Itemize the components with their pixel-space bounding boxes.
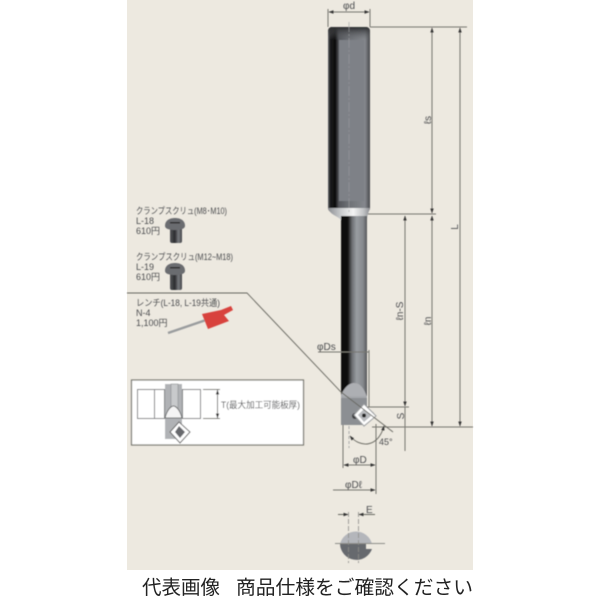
- dimension labels: 45°: [379, 437, 393, 447]
- accessory: wrench N-4: [136, 298, 233, 333]
- caption: 代表画像: [142, 577, 220, 599]
- accessory: clamp screw L-18: クランプスクリュ(M8･M10): [136, 206, 227, 216]
- centre line: [348, 22, 350, 212]
- accessory: clamp screw L-19: L-19: [136, 262, 154, 272]
- icon: screw: [165, 263, 185, 290]
- icon: screw: [165, 218, 185, 243]
- dimension labels: ℓn-S: [395, 301, 406, 320]
- dimension labels: φDs: [317, 342, 336, 353]
- thickness bracket: [203, 390, 220, 418]
- tool body: [328, 27, 376, 426]
- plates: [138, 390, 200, 418]
- inset: plate thickness: [132, 380, 304, 445]
- accessory: clamp screw L-19: クランプスクリュ(M12~M18): [136, 252, 233, 262]
- group: soft drawing: [127, 1, 473, 563]
- accessory: wrench N-4: N-4: [136, 308, 151, 318]
- dimension labels: L: [450, 224, 461, 230]
- dimension labels: E: [366, 505, 373, 516]
- accessory: clamp screw L-19: 610円: [136, 272, 160, 282]
- end view cross-section: [335, 512, 385, 563]
- dimension labels: [317, 1, 461, 516]
- dimension labels: ℓn: [423, 317, 434, 325]
- icon: wrench: [168, 306, 233, 333]
- inset insert: [170, 422, 190, 443]
- dimension labels: φDℓ: [345, 480, 363, 491]
- shank: [328, 27, 370, 220]
- beige background panel: [127, 0, 473, 570]
- insert: [354, 404, 376, 426]
- caption: 商品仕様をご確認ください: [236, 577, 473, 599]
- thickness label: T(最大加工可能板厚): [221, 399, 300, 410]
- shaft: [341, 216, 367, 396]
- dimension labels: φd: [343, 1, 355, 12]
- accessory: clamp screw L-18: L-18: [136, 216, 154, 226]
- cutter head: [341, 383, 374, 425]
- accessory: wrench N-4: 1,100円: [136, 318, 168, 328]
- accessory: clamp screw L-18: 610円: [136, 226, 160, 236]
- 45 degree arc: [350, 426, 384, 444]
- leader line: [127, 293, 393, 432]
- dimension lines: [318, 9, 473, 494]
- dimension labels: φD: [353, 455, 367, 466]
- dashed axis: [348, 426, 350, 448]
- accessory: wrench N-4: レンチ(L-18, L-19共通): [136, 298, 220, 308]
- inset tool: [165, 384, 182, 439]
- accessory: clamp screw L-18: [136, 206, 227, 243]
- dimension labels: ℓs: [423, 116, 434, 124]
- dimension labels: S: [396, 412, 407, 419]
- accessory: clamp screw L-19: [136, 252, 233, 290]
